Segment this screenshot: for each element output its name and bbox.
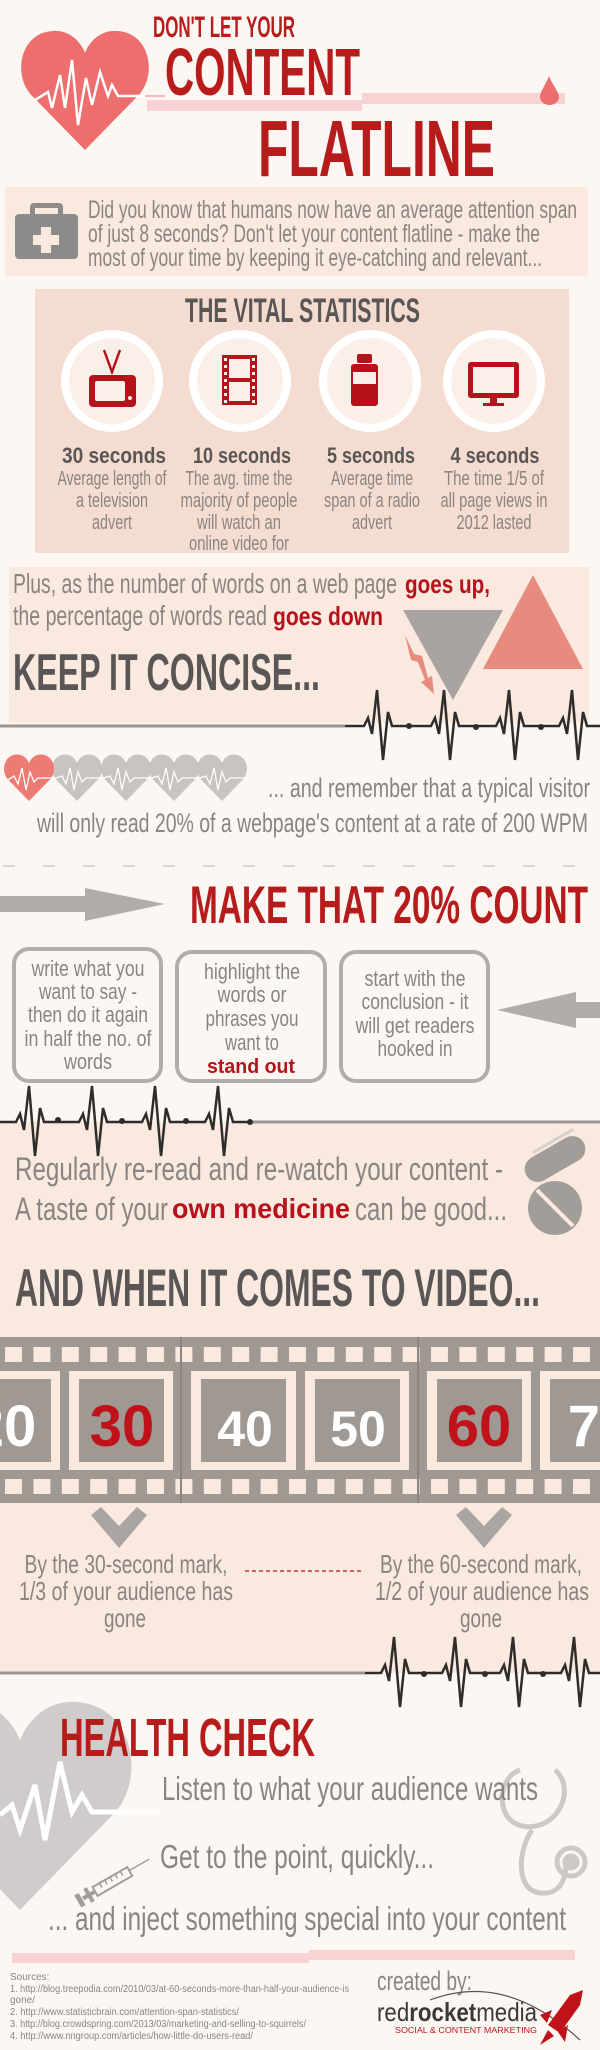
ecg line 1 [0, 690, 600, 760]
panel: medicine and video [0, 1086, 600, 1673]
credit logo: SOCIAL & CONTENT MARKETING [395, 2026, 537, 2035]
title [153, 11, 495, 193]
pink bar [147, 93, 565, 111]
title: CONTENT [165, 35, 360, 110]
ecg line 2 [0, 1086, 600, 1156]
text: medicine [15, 1151, 507, 1227]
icon: grey heart [0, 1702, 160, 1910]
stats text: online video for [189, 533, 289, 555]
stats text: The avg. time the [186, 468, 292, 490]
text: medicine: A taste of your [15, 1191, 168, 1227]
header heart [21, 31, 165, 150]
icon: first aid kit [15, 203, 78, 259]
icon: stethoscope [502, 1770, 585, 1893]
stats text: 5 seconds [327, 443, 415, 468]
box: highlight: highlight the [204, 959, 300, 984]
text: words up/down [13, 568, 490, 631]
panel: keep it concise [9, 567, 589, 723]
icon: chevron 60 [456, 1507, 512, 1548]
film strip [0, 1337, 600, 1503]
text: 30 second: By the 30-second mark, [24, 1549, 228, 1579]
stats text [58, 443, 548, 555]
box: conclusion: will get readers [355, 1013, 474, 1038]
film strip: 50 [330, 1401, 386, 1457]
intro text [88, 196, 577, 272]
icon: blood drop [540, 76, 559, 105]
sources: 1. http://blog.treepodia.com/2010/03/at-60-seconds-more-than-half-your-audience-is [10, 1984, 349, 1995]
icon: monitor [443, 330, 545, 432]
text: 30 second [19, 1549, 233, 1633]
sources: 2. http://www.statisticbrain.com/attention-span-statistics/ [10, 2007, 239, 2018]
box: highlight: words or [217, 982, 286, 1007]
stats text: all page views in [440, 490, 548, 512]
text: health tips: Get to the point, quickly... [160, 1838, 434, 1875]
icon: rocket [540, 1990, 583, 2045]
box: highlight: phrases you [206, 1006, 298, 1031]
arrow: left [497, 992, 600, 1028]
text: 30 second: gone [104, 1603, 146, 1633]
credit logo: redrocketmedia [377, 1997, 537, 2027]
film strip: 30 [90, 1394, 154, 1459]
box: write: words [63, 1049, 112, 1074]
icon: film [189, 330, 291, 432]
credit logo: created by: [377, 1966, 472, 1996]
stats text: advert [352, 512, 392, 534]
text: remember [36, 773, 590, 838]
stats text: 4 seconds [450, 443, 540, 468]
text: 60 second: gone [460, 1603, 502, 1633]
box: conclusion: hooked in [378, 1036, 452, 1061]
icon: hearts row [4, 755, 247, 801]
box: write: write what you [31, 956, 145, 981]
text: medicine: can be good... [355, 1191, 507, 1227]
ecg line 3 [0, 1637, 600, 1707]
heading: keep it concise: KEEP IT CONCISE... [13, 644, 320, 702]
text: words up/down: goes down [273, 601, 383, 631]
heading: vital statistics: THE VITAL STATISTICS [185, 292, 420, 330]
icon: bottle [319, 330, 421, 432]
sources: gone/ [10, 1995, 35, 2006]
text: 30 second: 1/3 of your audience has [19, 1576, 233, 1606]
heading: health check: HEALTH CHECK [60, 1708, 315, 1768]
stats text: a television [76, 490, 148, 512]
sources: 3. http://blog.crowdspring.com/2013/03/marketing-and-selling-to-squirrels/ [10, 2019, 306, 2030]
sources: Sources: [10, 1972, 49, 1983]
box: highlight: want to [224, 1030, 279, 1055]
stats text: span of a radio [324, 490, 420, 512]
title: DON'T LET YOUR [153, 11, 295, 44]
film strip: 40 [217, 1401, 273, 1457]
sources: 4. http://www.nngroup.com/articles/how-little-do-users-read/ [10, 2031, 253, 2042]
box: write [14, 949, 161, 1081]
pink bar bottom [12, 1950, 575, 1963]
stats text: advert [92, 512, 132, 534]
stats text: The time 1/5 of [444, 468, 544, 490]
stats text: will watch an [196, 512, 281, 534]
box: conclusion [341, 952, 488, 1081]
icon: tv [61, 330, 163, 432]
text: medicine: own medicine [172, 1193, 350, 1224]
box: write: then do it again [28, 1002, 148, 1027]
text: words up/down: Plus, as the number of words on a web page [13, 568, 397, 599]
panel: vital statistics [35, 289, 569, 555]
text: words up/down: the percentage of words read [13, 600, 267, 631]
credit logo [377, 1966, 583, 2045]
icon: syringe [74, 1853, 154, 1908]
stats text: Average length of [58, 468, 167, 490]
stats text: majority of people [180, 490, 298, 512]
arrow: right [0, 888, 165, 921]
box: highlight: stand out [207, 1056, 295, 1078]
text: words up/down: goes up, [405, 569, 490, 599]
icon: triangles [403, 575, 583, 700]
film strip: 60 [447, 1394, 511, 1459]
sources [10, 1972, 349, 2042]
box: conclusion: conclusion - it [362, 989, 468, 1014]
stats text: 2012 lasted [456, 512, 532, 534]
stats text: Average time [331, 468, 413, 490]
text: health tips [48, 1770, 566, 1937]
stats text: 10 seconds [193, 443, 291, 468]
stats text: 30 seconds [62, 443, 166, 468]
box: highlight [177, 952, 325, 1081]
box: write: in half the no. of [24, 1026, 152, 1051]
box: conclusion: start with the [364, 966, 466, 991]
icon: chevron 30 [91, 1507, 147, 1548]
box: write: want to say - [38, 979, 137, 1004]
text: 60 second [375, 1549, 589, 1633]
icon: pills [520, 1130, 590, 1235]
panel: intro [5, 187, 588, 276]
